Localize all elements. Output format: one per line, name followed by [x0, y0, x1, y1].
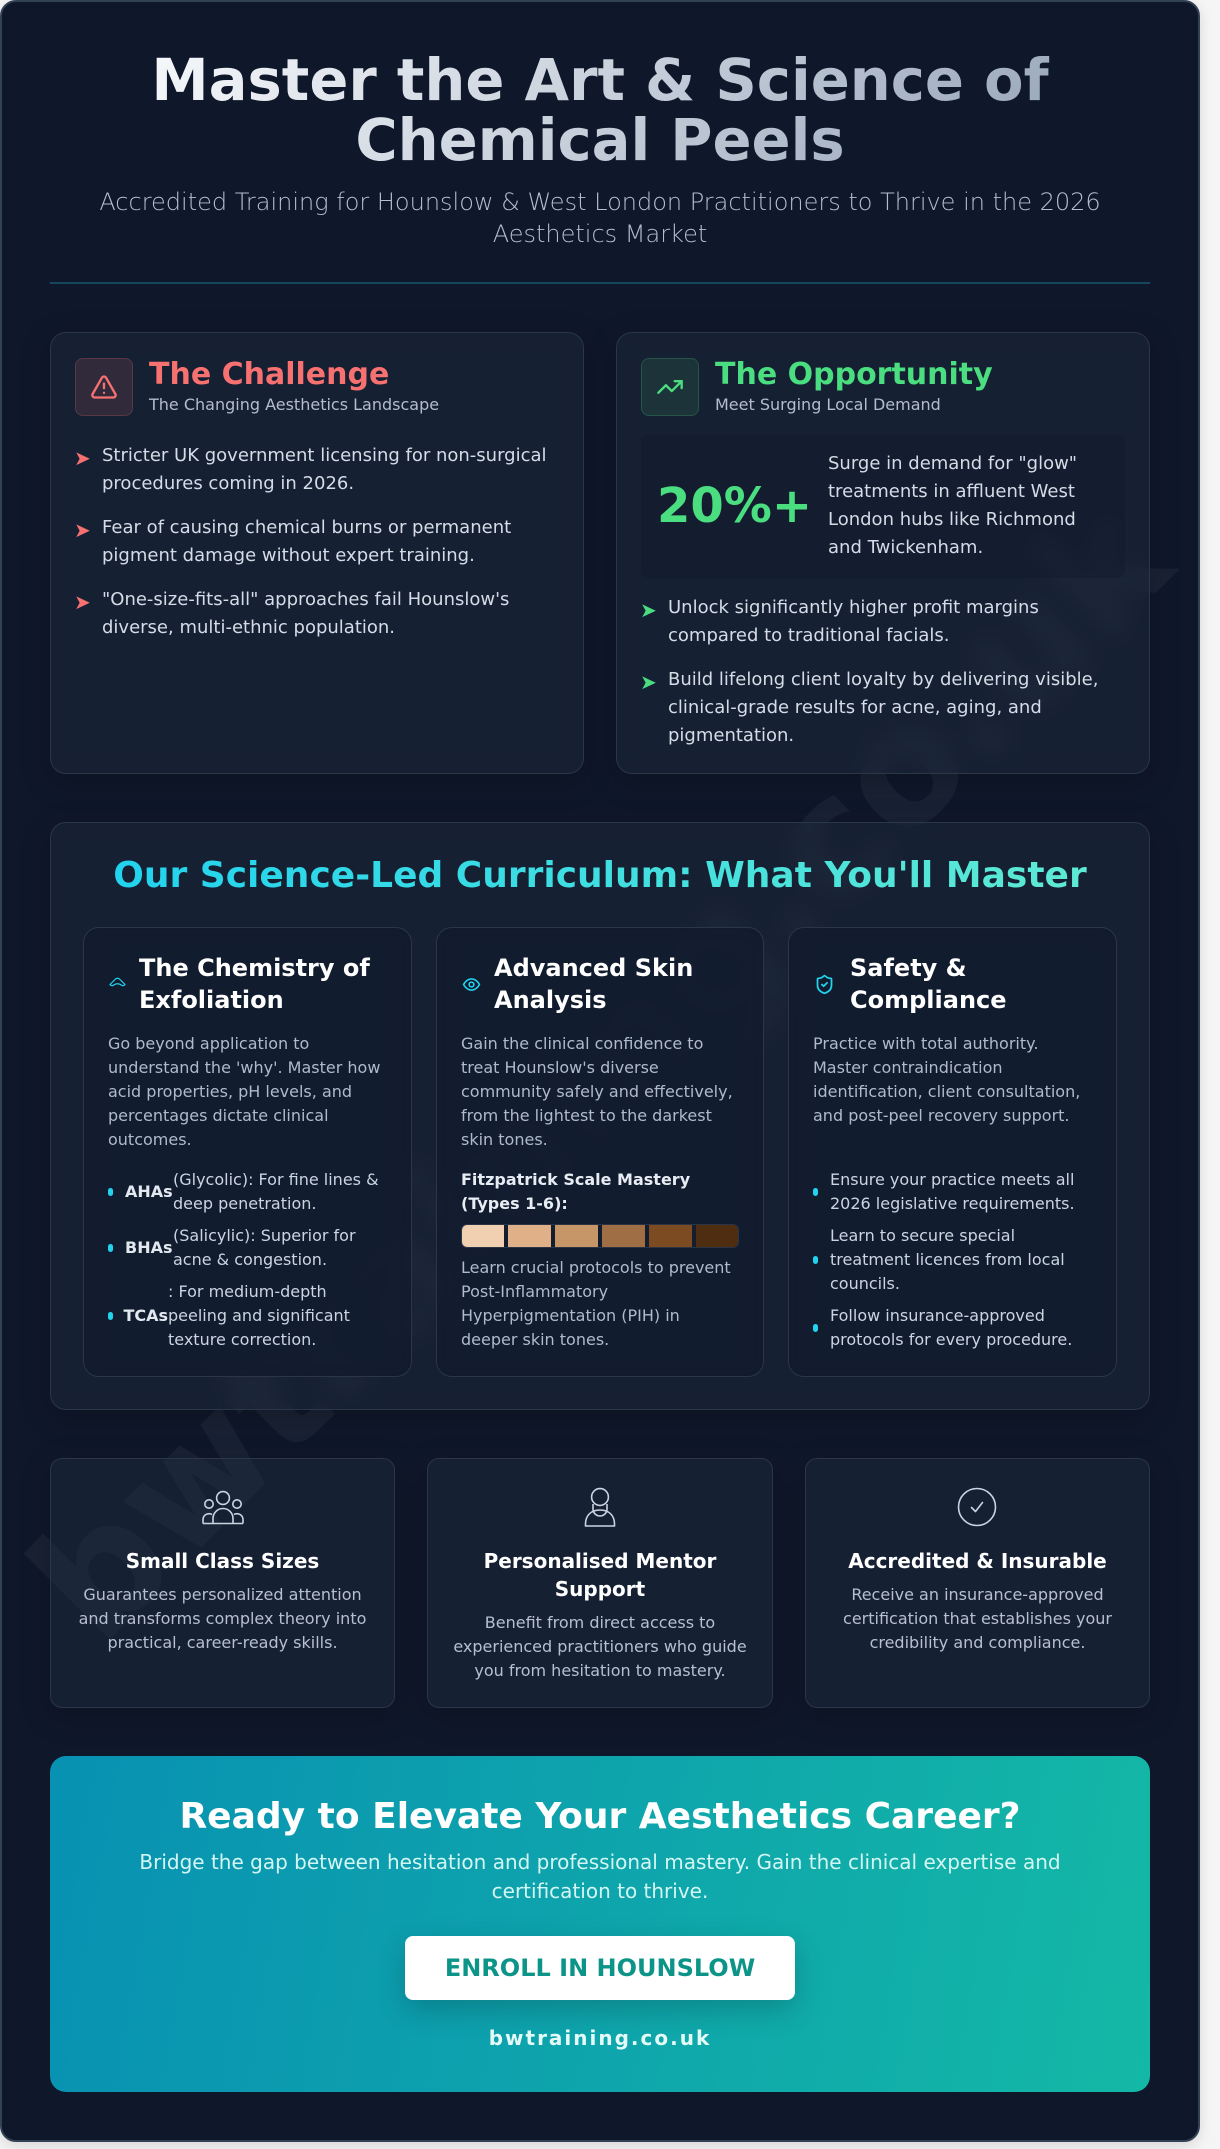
bullet text: Stricter UK government licensing for non-surgical	[102, 445, 547, 466]
feature: accredited and insurable	[805, 1458, 1150, 1708]
card description: identification, client consultation,	[813, 1082, 1080, 1101]
panel: curriculum	[50, 822, 1150, 1410]
fitzpatrick label: Fitzpatrick Scale Mastery	[461, 1170, 690, 1189]
bullet text	[102, 445, 547, 494]
bullet text: "One-size-fits-all" approaches fail Hounslow's	[102, 589, 509, 610]
PIH note: deeper skin tones.	[461, 1330, 609, 1349]
bullet text: pigment damage without expert training.	[102, 545, 475, 566]
call to action panel	[50, 1756, 1150, 2092]
icon: trending up	[641, 358, 699, 416]
enroll button	[405, 1936, 795, 2000]
card heading: Analysis	[494, 986, 607, 1014]
icon: group	[202, 1490, 244, 1524]
list item: BHAs: BHAs	[125, 1238, 172, 1257]
stat text: London hubs like Richmond	[828, 509, 1076, 530]
list item: Follow insurance-approved	[830, 1306, 1045, 1325]
card description	[813, 1034, 1080, 1125]
bullet: ➤	[74, 590, 91, 614]
card description: outcomes.	[108, 1130, 192, 1149]
feature heading: Support	[555, 1577, 645, 1601]
subtitle	[99, 188, 1101, 248]
list item: Learn to secure special	[830, 1226, 1015, 1245]
icon: mentor	[584, 1488, 616, 1527]
feature heading	[484, 1549, 716, 1601]
fitzpatrick label	[461, 1170, 690, 1213]
list item: councils.	[830, 1274, 900, 1293]
feature heading: Accredited & Insurable	[848, 1549, 1107, 1573]
card description: percentages dictate clinical	[108, 1106, 329, 1125]
list item: TCAs: texture correction.	[168, 1330, 316, 1349]
cta heading: Ready to Elevate Your Aesthetics Career?	[179, 1796, 1021, 1837]
cta text: Bridge the gap between hesitation and professional mastery. Gain the clinical expertise and	[139, 1850, 1061, 1874]
subheading: The Changing Aesthetics Landscape	[149, 395, 439, 414]
list item: AHAs	[108, 1170, 379, 1213]
feature text: Guarantees personalized attention	[83, 1585, 362, 1604]
feature text: experienced practitioners who guide	[453, 1637, 747, 1656]
feature: small class sizes	[50, 1458, 395, 1708]
list item: BHAs	[108, 1226, 356, 1269]
icon: check circle	[958, 1488, 996, 1526]
card description: Master contraindication	[813, 1058, 1003, 1077]
bullet text: procedures coming in 2026.	[102, 473, 354, 494]
card heading: Exfoliation	[139, 986, 284, 1014]
list item: BHAs: (Salicylic): Superior for	[173, 1226, 356, 1245]
bullet text	[102, 589, 509, 638]
subtitle: Aesthetics Market	[493, 220, 707, 248]
card description: and post-peel recovery support.	[813, 1106, 1070, 1125]
bullet: ➤	[640, 598, 657, 622]
heading: The Opportunity	[715, 357, 993, 392]
title	[130, 51, 1070, 171]
feature heading: Small Class Sizes	[126, 1549, 319, 1573]
list item: protocols for every procedure.	[830, 1330, 1072, 1349]
heading: The Challenge	[149, 357, 389, 392]
PIH note	[461, 1258, 731, 1349]
card description: from the lightest to the darkest	[461, 1106, 712, 1125]
bullet text	[668, 669, 1098, 746]
PIH note: Learn crucial protocols to prevent	[461, 1258, 731, 1277]
icon: shield check	[816, 974, 832, 994]
bullet text: diverse, multi-ethnic population.	[102, 617, 395, 638]
stat text	[828, 453, 1077, 558]
bullet: ➤	[74, 518, 91, 542]
feature text	[843, 1585, 1112, 1652]
list item: TCAs	[108, 1282, 350, 1349]
card description: Gain the clinical confidence to	[461, 1034, 703, 1053]
list item: AHAs: deep penetration.	[173, 1194, 316, 1213]
card description: Practice with total authority.	[813, 1034, 1038, 1053]
bullet text: Build lifelong client loyalty by delivering visible,	[668, 669, 1098, 690]
feature text: certification that establishes your	[843, 1609, 1112, 1628]
card description: acid properties, pH levels, and	[108, 1082, 352, 1101]
subtitle: Accredited Training for Hounslow & West London Practitioners to Thrive in the 2026	[99, 188, 1101, 216]
list item: AHAs: (Glycolic): For fine lines &	[173, 1170, 379, 1189]
feature text	[453, 1613, 747, 1680]
PIH note: Hyperpigmentation (PIH) in	[461, 1306, 680, 1325]
list item: TCAs: : For medium-depth	[168, 1282, 327, 1301]
feature text	[79, 1585, 366, 1652]
stat text: and Twickenham.	[828, 537, 983, 558]
card heading	[494, 954, 693, 1014]
panel: the opportunity	[616, 332, 1150, 774]
card heading: Advanced Skin	[494, 954, 693, 982]
card description: Go beyond application to	[108, 1034, 309, 1053]
fitzpatrick skin tone scale	[461, 1224, 739, 1248]
stat callout	[641, 434, 1125, 578]
bullet text: pigmentation.	[668, 725, 794, 746]
card description: understand the 'why'. Master how	[108, 1058, 380, 1077]
title: Master the Art & Science of	[151, 47, 1049, 114]
card description: community safely and effectively,	[461, 1082, 733, 1101]
list item: BHAs: acne & congestion.	[173, 1250, 327, 1269]
card description	[461, 1034, 733, 1149]
watermark: bwtraining.co.uk	[0, 466, 1200, 1676]
bullet text: Fear of causing chemical burns or permanent	[102, 517, 511, 538]
feature heading: Personalised Mentor	[484, 1549, 716, 1573]
enroll button: ENROLL IN HOUNSLOW	[445, 1954, 755, 1982]
list item: AHAs: AHAs	[125, 1182, 173, 1201]
bullet text: compared to traditional facials.	[668, 625, 949, 646]
card description	[108, 1034, 380, 1149]
bullet text	[668, 597, 1039, 646]
card description: treat Hounslow's diverse	[461, 1058, 659, 1077]
feature text: and transforms complex theory into	[79, 1609, 366, 1628]
fitzpatrick label: (Types 1-6):	[461, 1194, 568, 1213]
card heading	[850, 954, 1007, 1014]
list item	[813, 1170, 1075, 1213]
stat text: treatments in affluent West	[828, 481, 1075, 502]
feature text: Receive an insurance-approved	[851, 1585, 1104, 1604]
panel: the challenge	[50, 332, 584, 774]
icon: molecule	[109, 978, 126, 986]
list item	[813, 1226, 1065, 1293]
cta text: certification to thrive.	[492, 1878, 708, 1902]
card: chemistry of exfoliation	[83, 927, 412, 1377]
list item: TCAs: peeling and significant	[168, 1306, 350, 1325]
list item: Ensure your practice meets all	[830, 1170, 1074, 1189]
card heading: Compliance	[850, 986, 1007, 1014]
feature text: Benefit from direct access to	[485, 1613, 715, 1632]
bullet: ➤	[640, 670, 657, 694]
list item: treatment licences from local	[830, 1250, 1065, 1269]
card description: skin tones.	[461, 1130, 548, 1149]
bullet: ➤	[74, 446, 91, 470]
card heading	[139, 954, 370, 1014]
card heading: Safety &	[850, 954, 967, 982]
feature: mentor support	[427, 1458, 773, 1708]
feature text: practical, career-ready skills.	[107, 1633, 338, 1652]
card: advanced skin analysis	[436, 927, 764, 1377]
cta text	[139, 1850, 1061, 1902]
icon: eye	[462, 978, 480, 991]
stat number: 20%+	[657, 478, 812, 534]
curriculum heading: Our Science-Led Curriculum: What You'll Master	[113, 855, 1087, 896]
icon: warning triangle	[75, 358, 133, 416]
title: Chemical Peels	[355, 107, 845, 174]
list item	[813, 1306, 1072, 1349]
card heading: The Chemistry of	[139, 954, 370, 982]
bullet text	[102, 517, 511, 566]
feature text: you from hesitation to mastery.	[474, 1661, 726, 1680]
card: safety and compliance	[788, 927, 1117, 1377]
bullet text: Unlock significantly higher profit margins	[668, 597, 1039, 618]
subheading: Meet Surging Local Demand	[715, 395, 941, 414]
list item: 2026 legislative requirements.	[830, 1194, 1075, 1213]
stat text: Surge in demand for "glow"	[828, 453, 1077, 474]
website: bwtraining.co.uk	[489, 2026, 711, 2050]
PIH note: Post-Inflammatory	[461, 1282, 608, 1301]
bullet text: clinical-grade results for acne, aging, and	[668, 697, 1042, 718]
list item: TCAs: TCAs	[124, 1306, 168, 1325]
feature text: credibility and compliance.	[870, 1633, 1085, 1652]
